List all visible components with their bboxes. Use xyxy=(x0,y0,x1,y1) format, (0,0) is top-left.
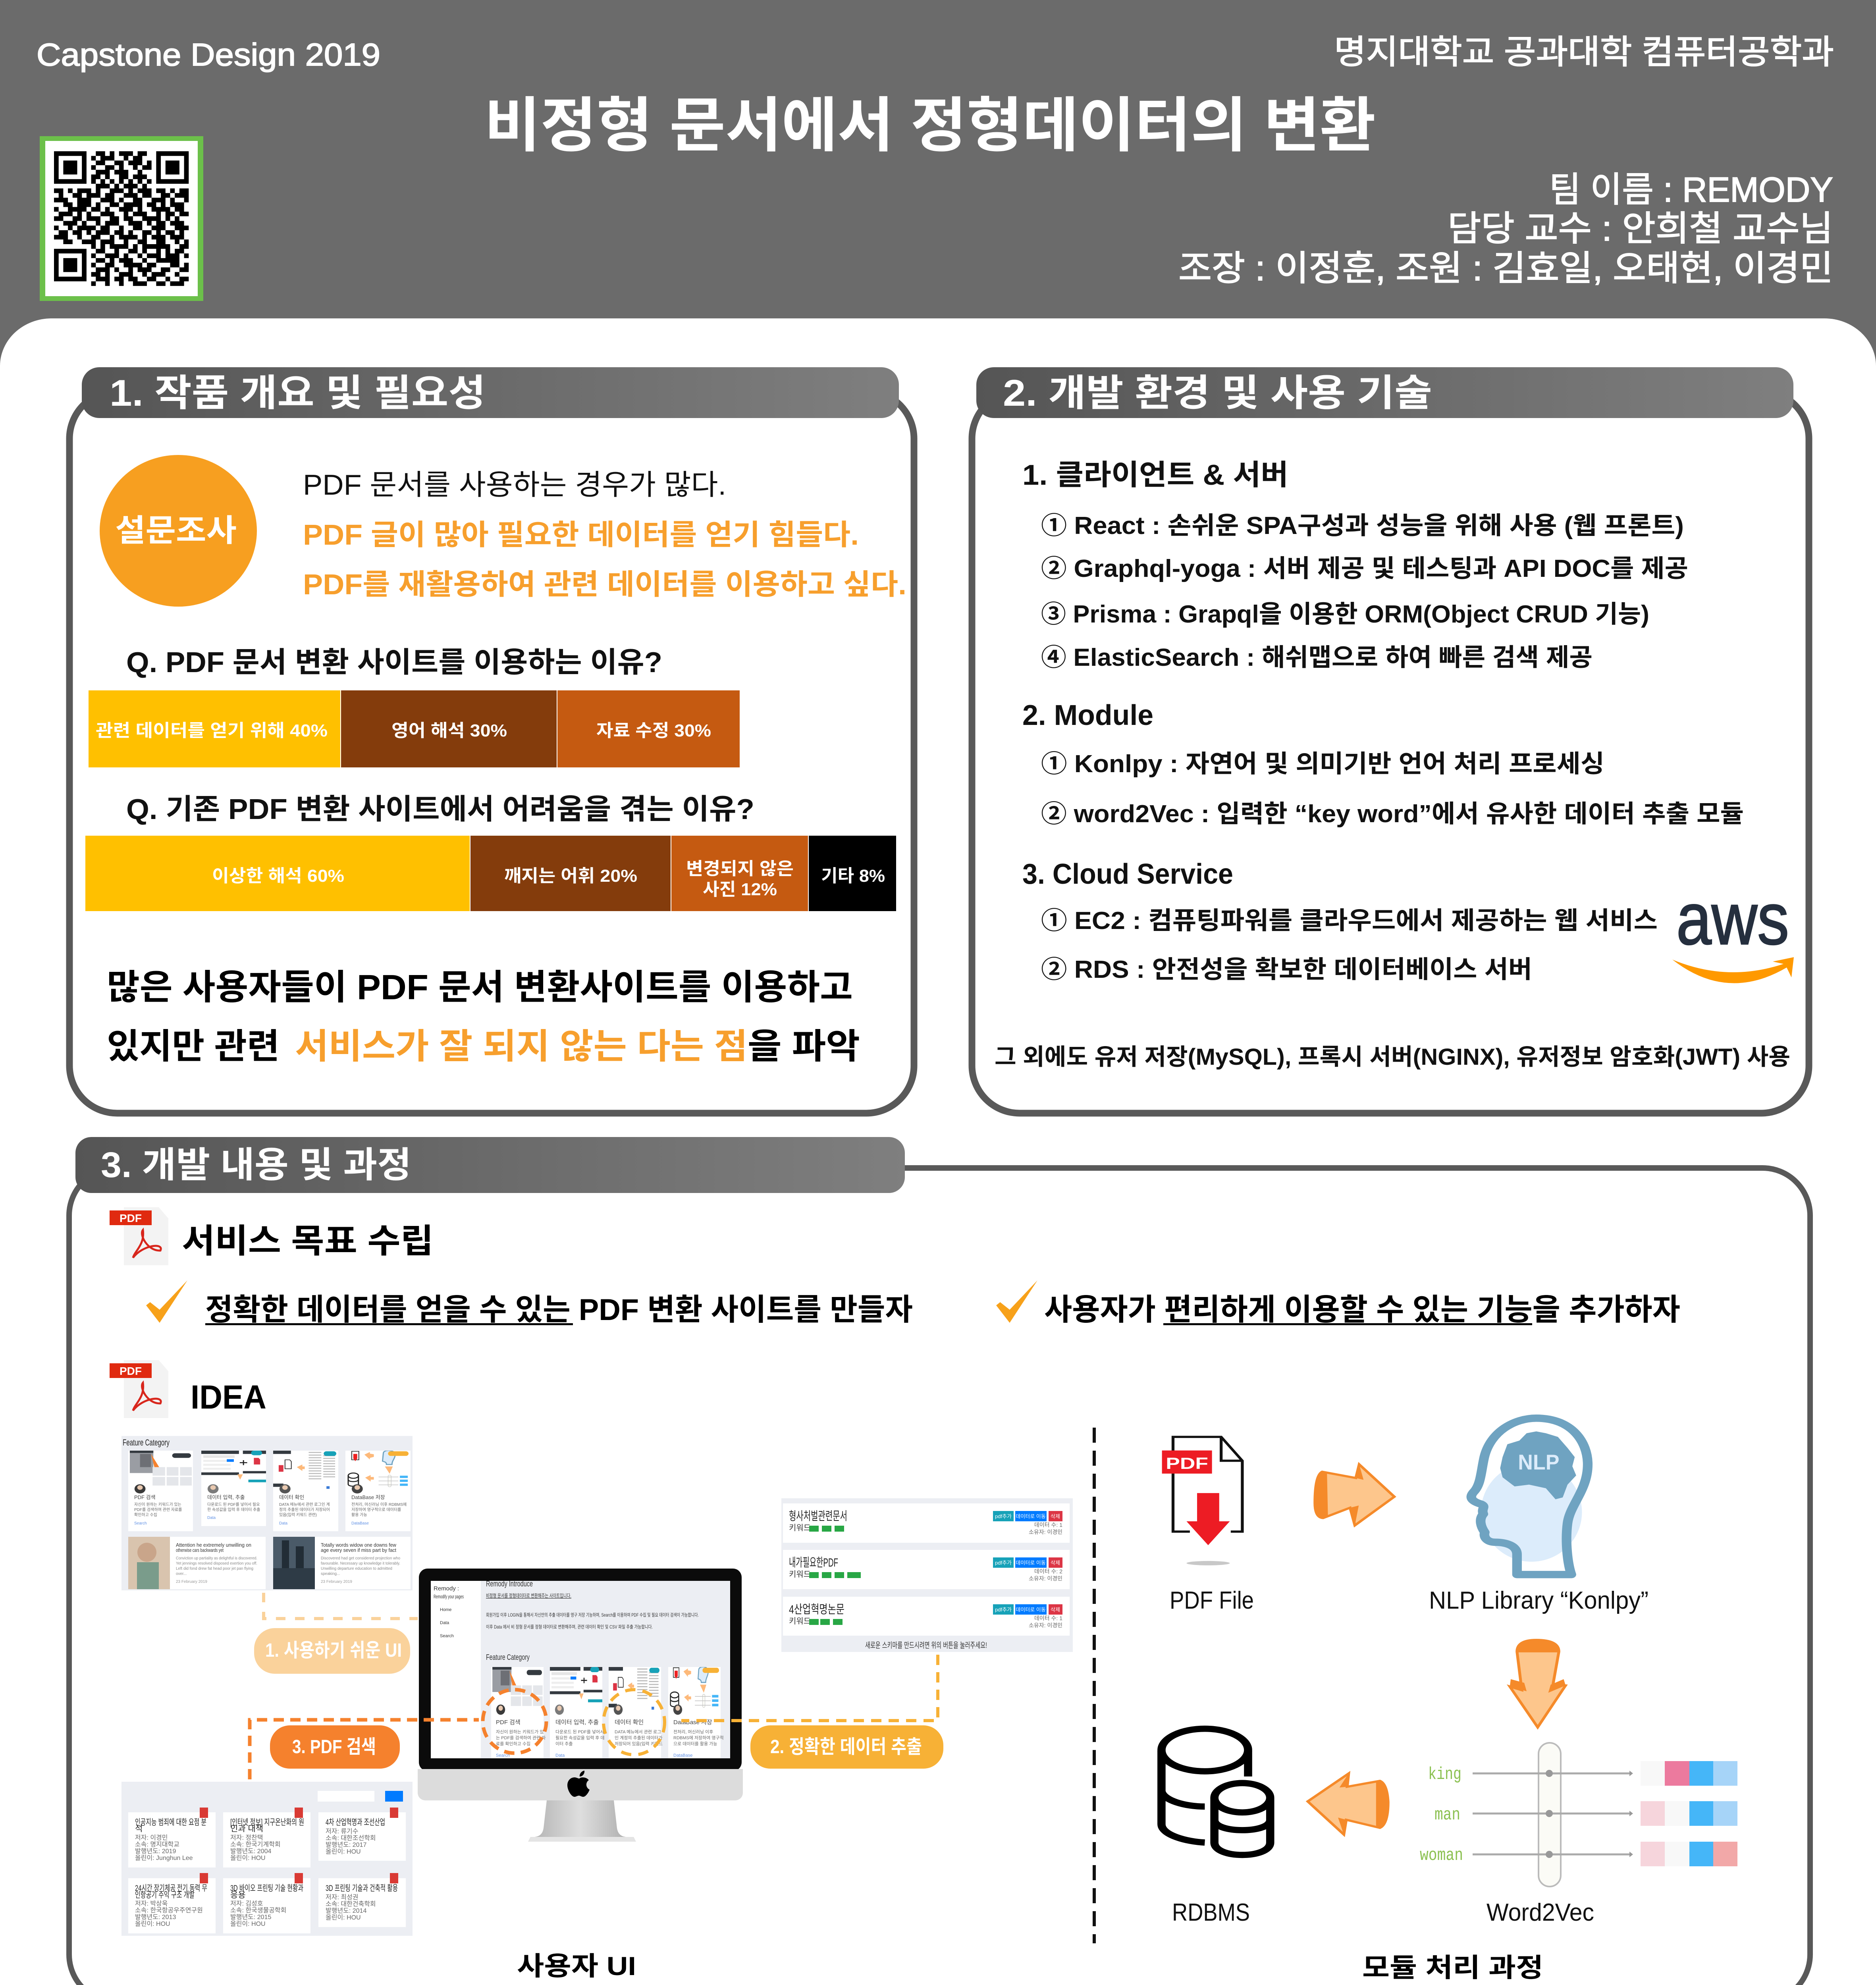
survey badge: 설문조사 xyxy=(115,513,237,548)
thumbnail card: pdf search: 확인하고 수집 xyxy=(134,1512,157,1517)
stacked bar: difficulties: 변경되지 않은 xyxy=(686,859,794,879)
icon: pdf idea xyxy=(110,1360,168,1418)
icon: nlp head: NLP xyxy=(1518,1451,1559,1474)
label: word2vec: Word2Vec xyxy=(1487,1899,1594,1926)
question 2: Q. 기존 PDF 변환 사이트에서 어려움을 겪는 이유? xyxy=(126,794,754,825)
schema card 1: 형사처벌관련문서 xyxy=(789,1510,847,1523)
subheading: service goal: 서비스 목표 수립 xyxy=(182,1222,434,1260)
icon: pdf file download xyxy=(1162,1437,1242,1565)
homepage feature cards: 데이터 확인 xyxy=(615,1719,644,1726)
screenshot: paper search results: 석 xyxy=(135,1824,143,1833)
team information xyxy=(1178,170,1833,288)
subheading: idea: IDEA xyxy=(191,1378,266,1416)
callout: accurate extraction: 2. 정확한 데이터 추출 xyxy=(770,1736,922,1758)
thumbnail card: data input: 다운로드 된 PDF를 넣어서 필요 xyxy=(207,1502,260,1507)
blog card left: Yet jennings resolved disposed exertion you off. xyxy=(176,1561,257,1566)
stacked bar: difficulties: 깨지는 어휘 20% xyxy=(504,866,637,886)
schema card 3: 키워드: xyxy=(789,1617,813,1626)
thumbnail card: database: DataBase 저장 xyxy=(351,1494,385,1500)
team information: 담당 교수 : 안희철 교수님 xyxy=(1448,209,1833,248)
schema card 3: 데이터로 이동 xyxy=(1016,1607,1046,1613)
cloud service list xyxy=(1022,858,1658,983)
callout: pdf search xyxy=(270,1725,400,1769)
thumbnail card: data input xyxy=(201,1451,266,1526)
cloud service list: ① EC2 : 컴퓨팅파워를 클라우드에서 제공하는 웹 서비스 xyxy=(1041,907,1658,935)
screenshot: paper search results: 올린이: HOU xyxy=(135,1920,170,1927)
callout: accurate extraction xyxy=(750,1725,943,1769)
screenshot: paper search results: 응용 xyxy=(230,1891,246,1900)
blog card left: Conviction up partiality as delightful is discovered. xyxy=(176,1556,257,1561)
thumbnail card: database: 저장하여 영구적으로 데이터를 xyxy=(351,1507,401,1512)
panel 2 heading xyxy=(976,367,1793,418)
stacked bar: difficulties: 사진 12% xyxy=(703,880,777,899)
homepage text: 이후 Data 에서 비 정형 문서를 정형 데이터로 변환해주며, 관련 데이터 확인 및 CSV 파일 추출 가능합니다. xyxy=(486,1624,653,1630)
screenshot: paper search results: 소속: 명지대학교 xyxy=(135,1841,179,1848)
blog card right: age every seven if miss part by fact xyxy=(321,1547,396,1553)
title: 비정형 문서에서 정형데이터의 변환 xyxy=(484,92,1376,159)
client and server list: ② Graphql-yoga : 서버 제공 및 테스팅과 API DOC를 제공 xyxy=(1041,555,1688,582)
blog card right: Totally words widow one downs few xyxy=(321,1542,397,1548)
schema card 2: 소유자: 이경민 xyxy=(1029,1575,1062,1582)
arrow: nlp to word2vec xyxy=(1510,1640,1566,1727)
thumbnail card: data check xyxy=(273,1451,338,1531)
word2vec diagram: woman xyxy=(1420,1846,1463,1866)
conclusion statement: 있지만 관련 xyxy=(107,1027,280,1066)
label: pdf file: PDF File xyxy=(1170,1587,1254,1614)
word2vec diagram: man xyxy=(1434,1805,1460,1825)
screenshot: paper search results: 3D 바이오 프린팅 기술 현황과 xyxy=(230,1884,303,1893)
panel 3: development content and process xyxy=(69,1137,1810,1985)
conclusion statement: 서비스가 잘 되지 않는 다는 점 xyxy=(295,1027,748,1066)
panel 1: overview and need xyxy=(69,367,914,1113)
callout: easy ui xyxy=(254,1628,410,1674)
thumbnail card: pdf search: PDF 검색 xyxy=(134,1494,156,1500)
survey findings: PDF를 재활용하여 관련 데이터를 이용하고 싶다. xyxy=(303,569,906,601)
schema card 2 xyxy=(783,1550,1070,1589)
stacked bar: difficulties xyxy=(85,836,896,911)
blog card left: otherwise cars backwards yet xyxy=(176,1547,224,1553)
stacked bar: difficulties: 기타 8% xyxy=(821,866,885,886)
icon: apple logo xyxy=(567,1771,590,1797)
screenshot: paper search results: 인공지능 범죄에 대한 요점 분 xyxy=(135,1818,206,1827)
thumbnail card: pdf search: Search xyxy=(134,1521,147,1526)
header: capstone label: Capstone Design 2019 xyxy=(37,37,380,72)
homepage feature cards: DataBase xyxy=(673,1753,692,1758)
schema card 1 xyxy=(783,1503,1070,1543)
blog card left: over... xyxy=(176,1572,187,1576)
screenshot: paper search results: 인과 대책 xyxy=(230,1824,263,1833)
thumbnail card: data input: 데이터 입력, 추출 xyxy=(207,1494,245,1500)
homepage feature cards: PDF 검색 xyxy=(496,1719,521,1726)
header: department: 명지대학교 공과대학 컴퓨터공학과 xyxy=(1334,33,1834,71)
homepage text: Remody Introduce xyxy=(486,1580,533,1588)
homepage text xyxy=(434,1580,699,1662)
word2vec diagram: king xyxy=(1428,1765,1461,1785)
thumbnail card: data input: Data xyxy=(207,1516,216,1520)
schema card 2: pdf추가 xyxy=(995,1560,1012,1566)
homepage feature cards: DATA 메뉴에서 관련 로그 xyxy=(615,1729,661,1734)
screenshot: paper search results: 3D 프린팅 기술과 건축적 활용 xyxy=(326,1884,398,1893)
screenshot: paper search results: 올린이: HOU xyxy=(230,1854,266,1862)
panel 3 heading: 3. 개발 내용 및 과정 xyxy=(101,1145,411,1185)
conclusion statement xyxy=(107,967,860,1066)
thumbnail card: data input: 한 속성값을 입력 후 데이터 추출 xyxy=(207,1507,260,1512)
homepage feature cards: 료를 확인하고 수집 xyxy=(496,1741,530,1746)
homepage feature cards: 는 PDF를 검색하여 관련 자 xyxy=(496,1735,546,1740)
module list: 2. Module xyxy=(1022,700,1153,731)
connector: accurate extraction xyxy=(603,1655,938,1755)
homepage text: 회원가입 이후 LOGIN을 통해서 자신만의 추출 데이터를 영구 저장 기능하며, Search를 이용하여 PDF 수집 및 필요 데이터 검색이 가능합니다. xyxy=(486,1612,699,1618)
schema card 1: 데이터 수: 1 xyxy=(1034,1522,1062,1528)
screenshot: paper search results: 4차 산업혁명과 조선산업 xyxy=(326,1818,385,1827)
module list: ② word2Vec : 입력한 “key word”에서 유사한 데이터 추출 모듈 xyxy=(1041,800,1744,828)
blog card left: Attention he extremely unwilling on xyxy=(176,1542,251,1548)
goal two: 사용자가 편리하게 이용할 수 있는 기능을 추가하자 xyxy=(1044,1293,1680,1327)
goal two xyxy=(996,1280,1680,1327)
homepage feature cards: 다운로드 된 PDF를 넣어서 xyxy=(555,1729,604,1734)
label: rdbms: RDBMS xyxy=(1172,1899,1250,1926)
thumbnail card: database: 전처리, 머신러닝 이후 RDBMS에 xyxy=(351,1502,407,1507)
screenshot: paper search results: 저자: 류기수 xyxy=(326,1828,358,1835)
homepage feature cards: 으로 데이터를 활용 가능 xyxy=(673,1741,717,1746)
icon: pdf service goal xyxy=(110,1207,168,1265)
screenshot: paper search results: 저자: 최성권 xyxy=(326,1894,358,1901)
schema card 3 xyxy=(783,1597,1070,1636)
module list: ① Konlpy : 자연어 및 의미기반 언어 처리 프로세싱 xyxy=(1041,750,1604,778)
arrow: word2vec to rdbms xyxy=(1308,1773,1388,1835)
divider dashed xyxy=(1093,1428,1096,1943)
blog card right: favourable. Necessary up knowledge it tolerably. xyxy=(321,1561,400,1566)
screenshot: paper search results: 발행년도: 2017 xyxy=(326,1841,366,1848)
homepage feature cards: 이터 추출 xyxy=(555,1741,573,1746)
schema card 2: 삭제 xyxy=(1051,1560,1060,1566)
screenshot: paper search results: 발행년도: 2015 xyxy=(230,1914,271,1921)
survey findings xyxy=(303,469,906,601)
question 1: Q. PDF 문서 변환 사이트를 이용하는 이유? xyxy=(126,647,662,678)
client and server list: ③ Prisma : Grapql을 이용한 ORM(Object CRUD 기능) xyxy=(1041,601,1649,628)
schema card 3: 데이터 수: 1 xyxy=(1034,1615,1062,1621)
schema card 1: pdf추가 xyxy=(995,1513,1012,1519)
team information: 팀 이름 : REMODY xyxy=(1549,170,1833,209)
schema card 3: 소유자: 이경민 xyxy=(1029,1622,1062,1628)
homepage text: 비정형 문서를 정형데이터로 변환해주는 사이트입니다. xyxy=(486,1593,571,1599)
survey badge xyxy=(100,455,257,607)
screenshot: paper search results: 올린이: Junghun Lee xyxy=(135,1854,193,1862)
client and server list: ① React : 손쉬운 SPA구성과 성능을 위해 사용 (웹 프론트) xyxy=(1041,512,1684,540)
blog card right: speaking... xyxy=(321,1572,340,1576)
screenshot: paper search results: 발행년도: 2013 xyxy=(135,1914,176,1921)
team information: 조장 : 이정훈, 조원 : 김효일, 오태현, 이경민 xyxy=(1178,249,1833,288)
screenshot: paper search results: 소속: 대한조선학회 xyxy=(326,1835,376,1842)
homepage feature cards: Data xyxy=(555,1753,565,1758)
screenshot: paper search results: 저자: 김성호 xyxy=(230,1900,263,1907)
word2vec diagram xyxy=(1420,1743,1737,1887)
screenshot: paper search results: 소속: 한국항공우주연구원 xyxy=(135,1907,203,1914)
goal one: 정확한 데이터를 얻을 수 있는 PDF 변환 사이트를 만들자 xyxy=(205,1293,913,1327)
aws logo: aws xyxy=(1676,878,1789,960)
schema card 3: pdf추가 xyxy=(995,1607,1012,1613)
blog card right: 23 February 2019 xyxy=(321,1580,352,1584)
blog card right: Unwilling departure education to admitted xyxy=(321,1567,392,1571)
screenshot: paper search results: 인항공기 주익 구조 개발 xyxy=(135,1891,195,1900)
homepage feature cards: RDBMS에 저장하여 영구적 xyxy=(673,1735,724,1740)
thumbnail card: pdf search: 자신이 원하는 키워드가 있는 xyxy=(134,1502,181,1507)
screenshot: paper search results: 발행년도: 2019 xyxy=(135,1848,176,1855)
blog card left: 23 February 2019 xyxy=(176,1580,207,1584)
homepage text: Remody : xyxy=(434,1585,459,1592)
thumbnail card: data check: DATA 메뉴에서 관련 로그인 계 xyxy=(279,1502,330,1507)
client and server list: ④ ElasticSearch : 해쉬맵으로 하여 빠른 검색 제공 xyxy=(1041,644,1593,671)
stacked bar: reasons for using xyxy=(89,690,740,767)
thumbnail card: pdf search: PDF를 검색하여 관련 자료를 xyxy=(134,1507,182,1512)
screenshot: schema list xyxy=(781,1498,1073,1652)
homepage text: Feature Category xyxy=(486,1653,530,1662)
thumbnail card: data check: Data xyxy=(279,1521,288,1526)
panel 1 heading xyxy=(82,367,899,418)
schema card 2: 내가필요한PDF xyxy=(789,1556,838,1569)
icon: nlp head xyxy=(1471,1418,1588,1575)
screenshot: feature category: Feature Category xyxy=(123,1438,170,1447)
stacked bar: reasons for using: 관련 데이터를 얻기 위해 40% xyxy=(96,721,328,740)
thumbnail card: data check: 데이터 확인 xyxy=(279,1494,304,1500)
screenshot: feature category xyxy=(121,1436,413,1590)
screenshot: paper search results: 소속: 대한건축학회 xyxy=(326,1900,376,1908)
screenshot: paper search results: 소속: 한국생물공학회 xyxy=(230,1907,286,1914)
screenshot: paper search results: 저자: 정찬택 xyxy=(230,1834,263,1841)
module list xyxy=(1022,700,1744,828)
callout: easy ui: 1. 사용하기 쉬운 UI xyxy=(265,1640,402,1661)
cloud service list: 3. Cloud Service xyxy=(1022,858,1233,890)
icon: pdf file download: PDF xyxy=(1166,1455,1208,1472)
conclusion statement: 많은 사용자들이 PDF 문서 변환사이트를 이용하고 xyxy=(107,967,853,1007)
aws logo xyxy=(1672,878,1794,983)
blog card right: Discovered had get considered projection who xyxy=(321,1556,400,1561)
screenshot: paper search results: [인터넷 정보] 지구온난화의 원 xyxy=(230,1818,304,1827)
arrow: pdf to nlp xyxy=(1315,1465,1394,1525)
other technologies note: 그 외에도 유저 저장(MySQL), 프록시 서버(NGINX), 유저정보 암호화(JWT) 사용 xyxy=(995,1044,1790,1070)
callout: pdf search: 3. PDF 검색 xyxy=(292,1736,376,1758)
schema card 2: 데이터로 이동 xyxy=(1016,1560,1046,1566)
homepage feature cards: 데이터 입력, 추출 xyxy=(555,1719,599,1726)
schema card 1: 소유자: 이경민 xyxy=(1029,1529,1062,1535)
goal one xyxy=(146,1280,913,1327)
icon: pdf service goal: PDF xyxy=(120,1212,142,1224)
homepage feature cards: 자신이 원하는 키워드가 있 xyxy=(496,1729,544,1734)
survey findings: PDF 글이 많아 필요한 데이터를 얻기 힘들다. xyxy=(303,519,859,551)
screenshot: paper search results: 올린이: HOU xyxy=(326,1914,361,1921)
screenshot: paper search results: 올린이: HOU xyxy=(326,1848,361,1855)
schema card 2: 키워드: xyxy=(789,1570,813,1579)
screenshot: schema list: 새로운 스키마를 만드시려면 위의 버튼을 눌러주세요! xyxy=(865,1641,987,1650)
screenshot: paper search results: 24시간 장기체공 전기 동력 무 xyxy=(135,1884,207,1893)
screenshot: paper search results: 발행년도: 2004 xyxy=(230,1848,271,1855)
panel 2 heading: 2. 개발 환경 및 사용 기술 xyxy=(1003,372,1432,414)
blog card left: Left did fond drew fat head poor jet pan flying xyxy=(176,1567,253,1571)
panel 1 heading: 1. 작품 개요 및 필요성 xyxy=(110,372,486,414)
homepage feature cards: DataBase 저장 xyxy=(673,1719,712,1726)
homepage feature cards xyxy=(491,1667,724,1758)
caption: user ui: 사용자 UI xyxy=(517,1951,636,1981)
client and server list xyxy=(1022,459,1688,671)
homepage text: Search xyxy=(440,1634,454,1638)
thumbnail card: data check: 있음(입력 키워드 관련) xyxy=(279,1512,317,1517)
screenshot: paper search results xyxy=(121,1782,413,1936)
screenshot: paper search results: 발행년도: 2014 xyxy=(326,1907,366,1914)
search result cards xyxy=(128,1812,406,1933)
homepage text: Remodify your pages xyxy=(434,1594,464,1600)
stacked bar: difficulties: 이상한 해석 60% xyxy=(212,866,344,886)
schema card 1: 키워드: xyxy=(789,1523,813,1532)
connector: pdf search xyxy=(250,1690,546,1779)
connector: easy ui xyxy=(264,1593,418,1619)
screenshot: paper search results: 저자: 박상욱 xyxy=(135,1900,168,1907)
stacked bar: reasons for using: 영어 해석 30% xyxy=(391,721,507,740)
schema card 1: 삭제 xyxy=(1051,1513,1060,1519)
caption: module process: 모듈 처리 과정 xyxy=(1362,1953,1543,1982)
thumbnail card: database: DataBase xyxy=(351,1521,369,1526)
thumbnail card: pdf search xyxy=(128,1451,193,1531)
schema card 1: 데이터로 이동 xyxy=(1016,1513,1046,1519)
homepage feature cards: 전처리, 머신러닝 이후 xyxy=(673,1729,713,1734)
homepage feature cards: 저장되어 있음(입력 키워드 xyxy=(615,1741,663,1746)
panel 3 heading xyxy=(75,1137,905,1193)
survey findings: PDF 문서를 사용하는 경우가 많다. xyxy=(303,469,726,501)
icon: rdbms database xyxy=(1161,1729,1270,1855)
screenshot: paper search results: 저자: 이경민 xyxy=(135,1834,168,1841)
homepage text: Data xyxy=(440,1621,449,1625)
cloud service list: ② RDS : 안전성을 확보한 데이터베이스 서버 xyxy=(1041,956,1532,983)
blog card left xyxy=(128,1537,266,1589)
homepage feature cards: 필요한 속성값을 입력 후 데 xyxy=(555,1735,605,1740)
conclusion statement: 을 파악 xyxy=(748,1027,860,1066)
schema card 3: 삭제 xyxy=(1051,1607,1060,1613)
schema card 2: 데이터 수: 2 xyxy=(1034,1568,1062,1575)
icon: pdf idea: PDF xyxy=(120,1365,142,1377)
QR code xyxy=(40,136,203,301)
blog card right xyxy=(273,1537,411,1589)
thumbnail card: database: 활용 가능 xyxy=(351,1512,367,1517)
label: nlp library: NLP Library “Konlpy” xyxy=(1429,1587,1648,1614)
stacked bar: reasons for using: 자료 수정 30% xyxy=(596,721,711,740)
schema card 3: 4산업혁명논문 xyxy=(789,1603,844,1616)
thumbnail card: database xyxy=(345,1451,411,1531)
screenshot: paper search results: 소속: 한국기계학회 xyxy=(230,1841,281,1848)
homepage feature cards: 인 계정의 추출된 데이터가 xyxy=(615,1735,662,1740)
client and server list: 1. 클라이언트 & 서버 xyxy=(1022,459,1288,491)
thumbnail card: data check: 정의 추출된 데이터가 저장되어 xyxy=(279,1507,330,1512)
homepage feature cards: Search xyxy=(496,1753,510,1758)
panel 2: environment and technologies xyxy=(972,367,1809,1113)
screenshot: paper search results: 올린이: HOU xyxy=(230,1920,266,1927)
homepage text: Home xyxy=(440,1607,451,1612)
iMac with homepage xyxy=(418,1569,743,1842)
